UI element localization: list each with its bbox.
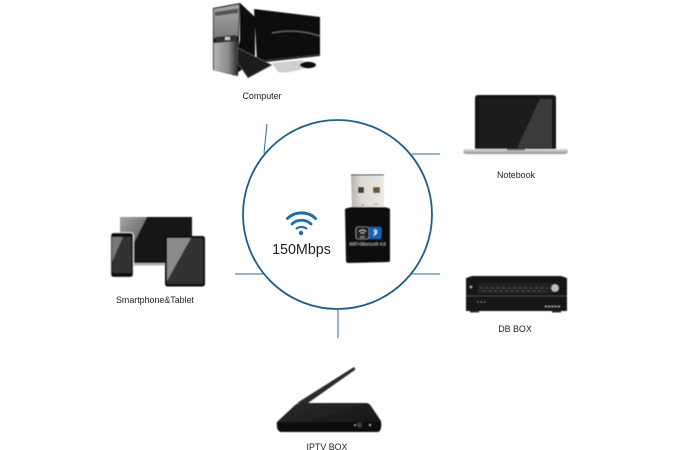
tablet <box>165 236 205 286</box>
computer mouse <box>300 62 316 68</box>
monitor behind devices <box>120 217 192 266</box>
smartphone <box>110 232 134 278</box>
product: USB adapter: WiFi+Bluetooth 4.0 <box>349 242 386 246</box>
antenna <box>297 367 356 403</box>
adapter body <box>345 207 390 263</box>
computer tower <box>213 3 255 76</box>
product: USB adapter <box>345 175 390 263</box>
label: notebook: Notebook <box>497 170 536 180</box>
notebook screen <box>475 95 556 150</box>
label: computer: Computer <box>243 91 282 101</box>
device: DB box receiver <box>466 276 567 312</box>
box body <box>277 403 381 432</box>
computer keyboard <box>237 48 272 78</box>
computer monitor <box>254 9 320 72</box>
device: notebook <box>463 95 568 154</box>
device: smartphone and tablet <box>110 217 205 286</box>
speed label: 150Mbps <box>272 242 331 258</box>
USB plug <box>351 175 384 208</box>
adapter badge: WiFi <box>360 236 365 239</box>
label: smartphone and tablet: Smartphone&Tablet <box>116 295 195 305</box>
diagram: central circle with connectors <box>235 120 440 338</box>
notebook base <box>463 149 568 154</box>
label: DB box: DB BOX <box>498 324 532 334</box>
icon: wifi signal <box>288 213 316 235</box>
device: IPTV box <box>277 367 381 432</box>
device: computer <box>213 3 320 78</box>
